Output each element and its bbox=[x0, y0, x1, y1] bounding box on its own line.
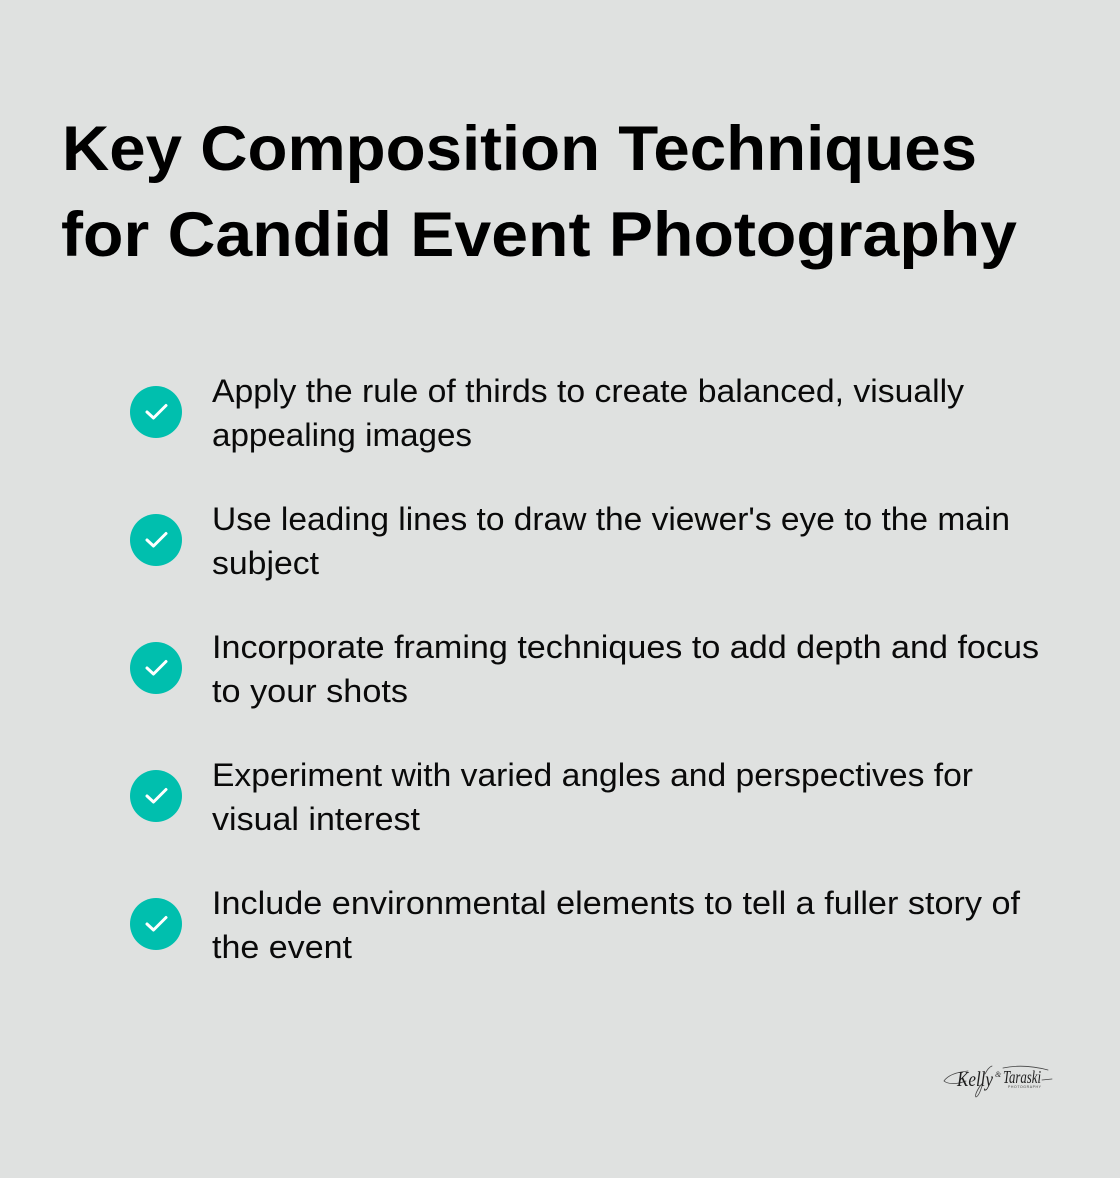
logo: signature: & bbox=[995, 1070, 1002, 1079]
title: for Candid Event Photography bbox=[61, 200, 1017, 270]
text: framing: to your shots bbox=[212, 673, 408, 709]
text: angles bbox=[212, 757, 973, 837]
text: leading lines bbox=[212, 501, 1010, 581]
icon: check badge bbox=[130, 898, 182, 950]
text: environment: Include environmental elements to tell a fuller story of bbox=[212, 885, 1020, 921]
text: rule of thirds bbox=[212, 373, 964, 453]
item 1: rule of thirds bbox=[130, 373, 964, 453]
logo: signature: Kelly bbox=[956, 1067, 994, 1091]
item 3: framing bbox=[130, 629, 1039, 709]
checklist bbox=[130, 373, 1039, 965]
item 2: leading lines bbox=[130, 501, 1010, 581]
text: environment bbox=[212, 885, 1020, 965]
logo: signature bbox=[944, 1066, 1052, 1097]
logo: signature: Taraski bbox=[1003, 1067, 1041, 1087]
icon: check badge bbox=[130, 514, 182, 566]
text: framing bbox=[212, 629, 1039, 709]
text: leading lines: subject bbox=[212, 545, 319, 581]
text: angles: Experiment with varied angles and perspectives for bbox=[212, 757, 973, 793]
title: Key Composition Techniques bbox=[62, 114, 977, 184]
text: angles: visual interest bbox=[212, 801, 420, 837]
title bbox=[61, 114, 1017, 270]
logo: signature: PHOTOGRAPHY bbox=[1008, 1085, 1042, 1089]
icon: check badge bbox=[130, 386, 182, 438]
text: rule of thirds: Apply the rule of thirds to create balanced, visually bbox=[212, 373, 964, 409]
item 4: angles bbox=[130, 757, 973, 837]
text: rule of thirds: appealing images bbox=[212, 417, 472, 453]
item 5: environment bbox=[130, 885, 1020, 965]
text: environment: the event bbox=[212, 929, 352, 965]
icon: check badge bbox=[130, 770, 182, 822]
text: leading lines: Use leading lines to draw the viewer's eye to the main bbox=[212, 501, 1010, 537]
icon: check badge bbox=[130, 642, 182, 694]
text: framing: Incorporate framing techniques to add depth and focus bbox=[212, 629, 1039, 665]
